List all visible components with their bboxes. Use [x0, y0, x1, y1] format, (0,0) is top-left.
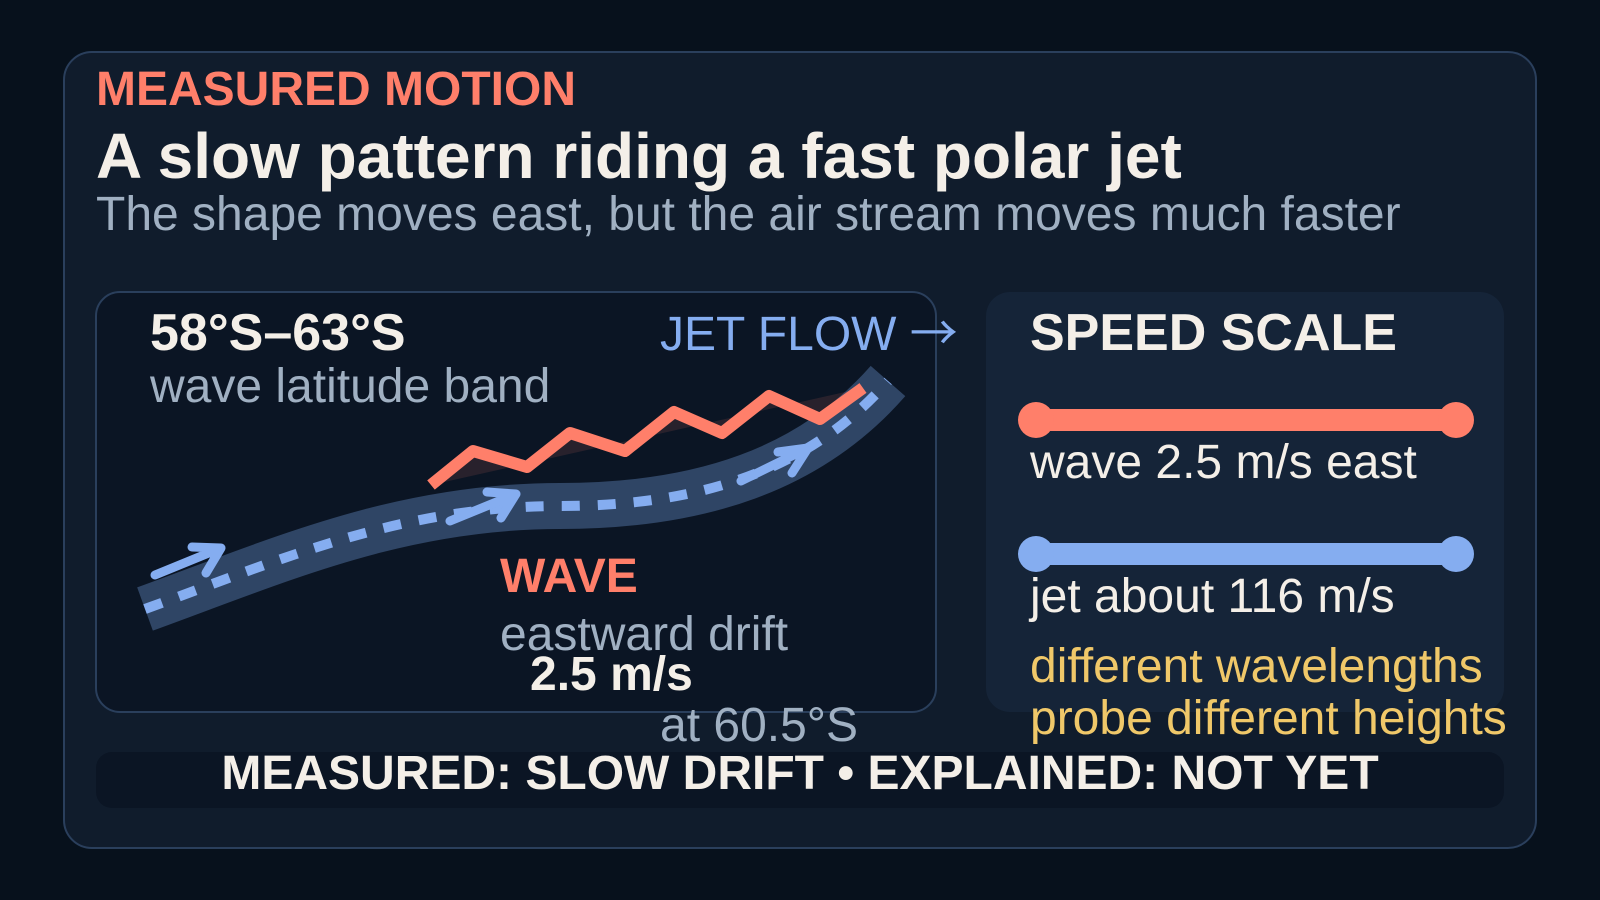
wave speed bar — [1018, 402, 1474, 438]
latitude note: at 60.5°S — [660, 699, 858, 752]
subtitle: The shape moves east, but the air stream moves much faster — [96, 188, 1401, 241]
bottom summary bar: MEASURED: SLOW DRIFT • EXPLAINED: NOT YET — [221, 747, 1379, 800]
panel: jet and wave diagram — [96, 292, 958, 752]
wave line — [431, 388, 863, 485]
latitude band caption: wave latitude band — [149, 360, 550, 413]
jet centre dashed line — [145, 381, 888, 609]
jet stream ribbon — [145, 381, 888, 609]
wavelength note: different wavelengths — [1030, 640, 1483, 693]
arrow: flow 1 — [155, 547, 221, 575]
kicker heading: MEASURED MOTION — [96, 63, 576, 116]
wave label: WAVE — [500, 550, 638, 603]
jet flow label: JET FLOW → — [660, 294, 958, 364]
arrow: flow 2 — [450, 492, 516, 521]
wave speed label: wave 2.5 m/s east — [1029, 436, 1417, 489]
wave drift caption: eastward drift — [500, 608, 788, 661]
jet speed label: jet about 116 m/s — [1028, 570, 1395, 623]
panel: speed scale — [986, 292, 1507, 745]
title: A slow pattern riding a fast polar jet — [96, 120, 1182, 192]
jet speed bar — [1018, 536, 1474, 572]
speed scale heading: SPEED SCALE — [1030, 304, 1397, 362]
latitude band value: 58°S–63°S — [150, 304, 406, 362]
height note: probe different heights — [1030, 692, 1507, 745]
wave speed value: 2.5 m/s — [530, 648, 693, 701]
arrow: flow 3 — [741, 448, 808, 481]
